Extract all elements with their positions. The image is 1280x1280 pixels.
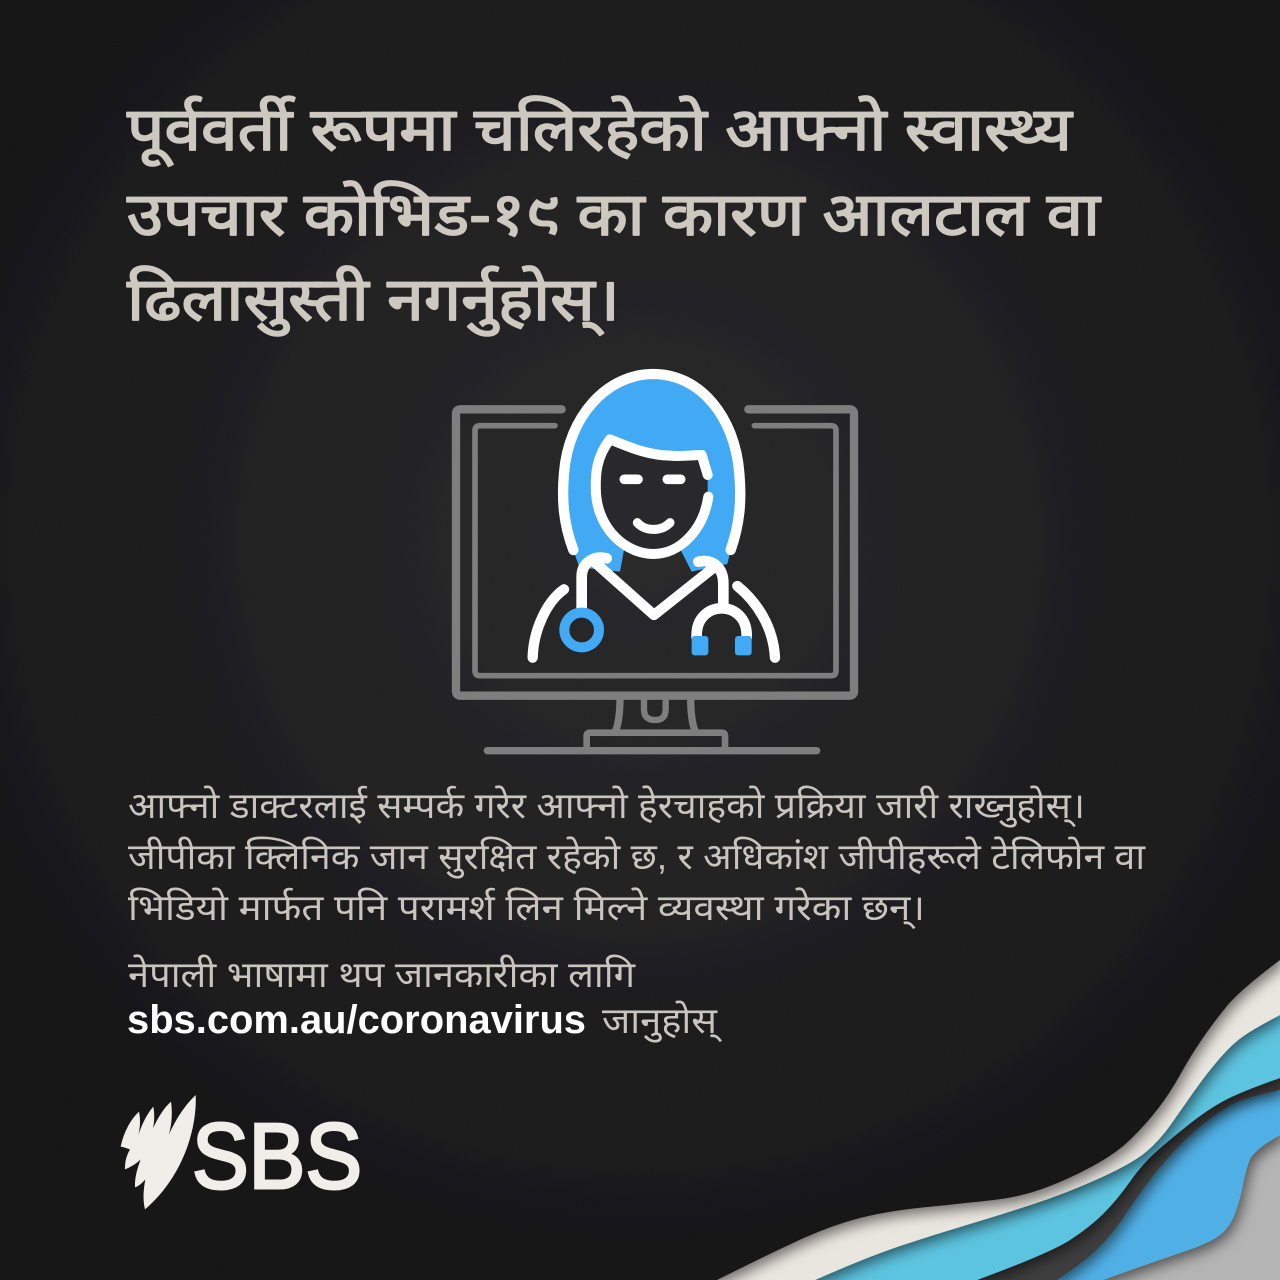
title: [127, 96, 1102, 336]
SBS logo: SBS: [192, 1104, 362, 1208]
scrubs and shoulders: [533, 562, 775, 658]
icon: doctor on monitor screen: [456, 374, 854, 751]
stethoscope: [582, 558, 747, 637]
call to action: जानुहोस्: [602, 1000, 722, 1043]
icon: SBS mark: [121, 1095, 196, 1209]
title: ढिलासुस्ती नगर्नुहोस्।: [127, 266, 620, 336]
doctor hair: [563, 374, 740, 572]
body text: भिडियो मार्फत पनि परामर्श लिन मिल्ने व्यवस्था गरेका छन्।: [128, 887, 925, 930]
call to action: [127, 954, 722, 1043]
title: पूर्ववर्ती रूपमा चलिरहेको आफ्नो स्वास्थ्य: [127, 96, 1073, 167]
monitor: [456, 409, 854, 751]
body text: [128, 785, 1146, 930]
body text: आफ्नो डाक्टरलाई सम्पर्क गरेर आफ्नो हेरचाहको प्रक्रिया जारी राख्नुहोस्।: [128, 785, 1085, 828]
call to action: नेपाली भाषामा थप जानकारीका लागि: [128, 954, 636, 995]
SBS logo: [121, 1095, 362, 1209]
body text: जीपीका क्लिनिक जान सुरक्षित रहेको छ, र अधिकांश जीपीहरूले टेलिफोन वा: [128, 836, 1146, 879]
eyes and smile: [624, 465, 681, 494]
doctor face: [596, 439, 708, 554]
call to action: sbs.com.au/coronavirus: [127, 998, 586, 1042]
title: उपचार कोभिड-१९ का कारण आलटाल वा: [127, 181, 1102, 248]
